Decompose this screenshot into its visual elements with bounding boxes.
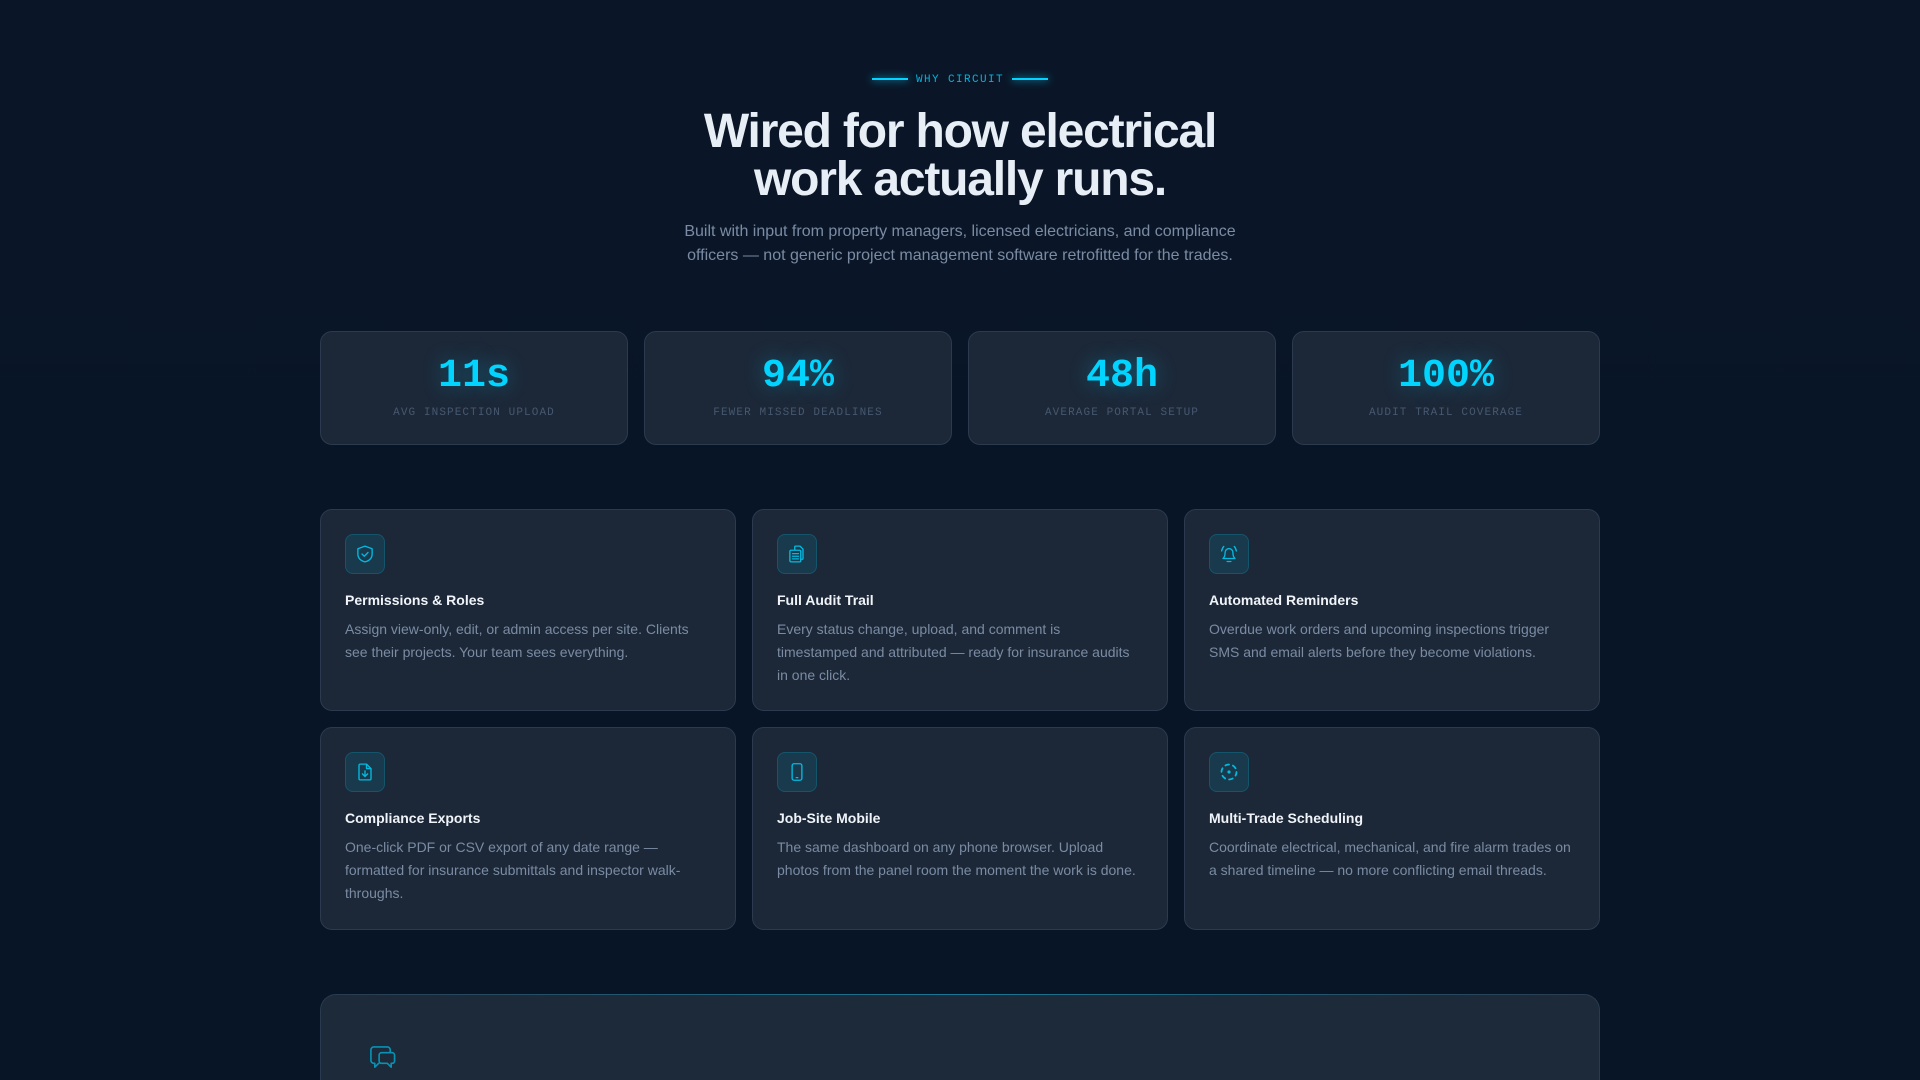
subtitle: [684, 223, 1236, 264]
description: Overdue work orders and upcoming inspections trigger SMS and email alerts before they become violations.: [1209, 621, 1549, 660]
description: One-click PDF or CSV export of any date range — formatted for insurance submittals and inspector walk-throughs.: [345, 839, 680, 901]
stat: portal setup: 48h: [1086, 354, 1158, 399]
subtitle: officers — not generic project management software retrofitted for the trades.: [687, 247, 1233, 264]
icon: phone: [777, 752, 817, 792]
stat: portal setup: [968, 331, 1276, 445]
stat: portal setup: AVERAGE PORTAL SETUP: [1045, 407, 1199, 419]
heading: Job-Site Mobile: [777, 810, 880, 826]
stat: inspection upload: [320, 331, 628, 445]
panel: testimonial: [320, 994, 1600, 1080]
icon: shield check: [345, 534, 385, 574]
heading: Multi-Trade Scheduling: [1209, 810, 1363, 826]
description: Coordinate electrical, mechanical, and fire alarm trades on a shared timeline — no more conflicting email threads.: [1209, 839, 1571, 878]
icon: dashed circle: [1209, 752, 1249, 792]
panel: full audit trail: [752, 509, 1168, 711]
eyebrow: why circuit: WHY CIRCUIT: [916, 74, 1004, 86]
stat: audit trail: [1292, 331, 1600, 445]
description: Every status change, upload, and comment is timestamped and attributed — ready for insurance audits in one click.: [777, 621, 1130, 683]
panel: job-site mobile: [752, 727, 1168, 930]
panel: compliance exports: [320, 727, 736, 930]
stat: audit trail: 100%: [1398, 354, 1494, 399]
panel: multi-trade scheduling: [1184, 727, 1600, 930]
stat: inspection upload: AVG INSPECTION UPLOAD: [393, 407, 555, 419]
icon: documents: [777, 534, 817, 574]
heading: Permissions & Roles: [345, 592, 484, 608]
stat: missed deadlines: FEWER MISSED DEADLINES: [713, 407, 883, 419]
icon: speech bubbles: [370, 1046, 396, 1068]
stat: missed deadlines: 94%: [762, 354, 834, 399]
heading: Automated Reminders: [1209, 592, 1358, 608]
icon: file download: [345, 752, 385, 792]
description: The same dashboard on any phone browser. Upload photos from the panel room the moment the work is done.: [777, 839, 1136, 878]
icon: bell: [1209, 534, 1249, 574]
heading: Full Audit Trail: [777, 592, 874, 608]
stat: inspection upload: 11s: [438, 354, 510, 399]
title: [704, 105, 1216, 206]
description: Assign view-only, edit, or admin access per site. Clients see their projects. Your team sees everything.: [345, 621, 689, 660]
title: work actually runs.: [754, 153, 1166, 206]
panel: automated reminders: [1184, 509, 1600, 711]
subtitle: Built with input from property managers, licensed electricians, and compliance: [684, 223, 1236, 240]
panel: permissions and roles: [320, 509, 736, 711]
stat: missed deadlines: [644, 331, 952, 445]
title: Wired for how electrical: [704, 105, 1216, 158]
stat: audit trail: AUDIT TRAIL COVERAGE: [1369, 407, 1523, 419]
heading: Compliance Exports: [345, 810, 480, 826]
